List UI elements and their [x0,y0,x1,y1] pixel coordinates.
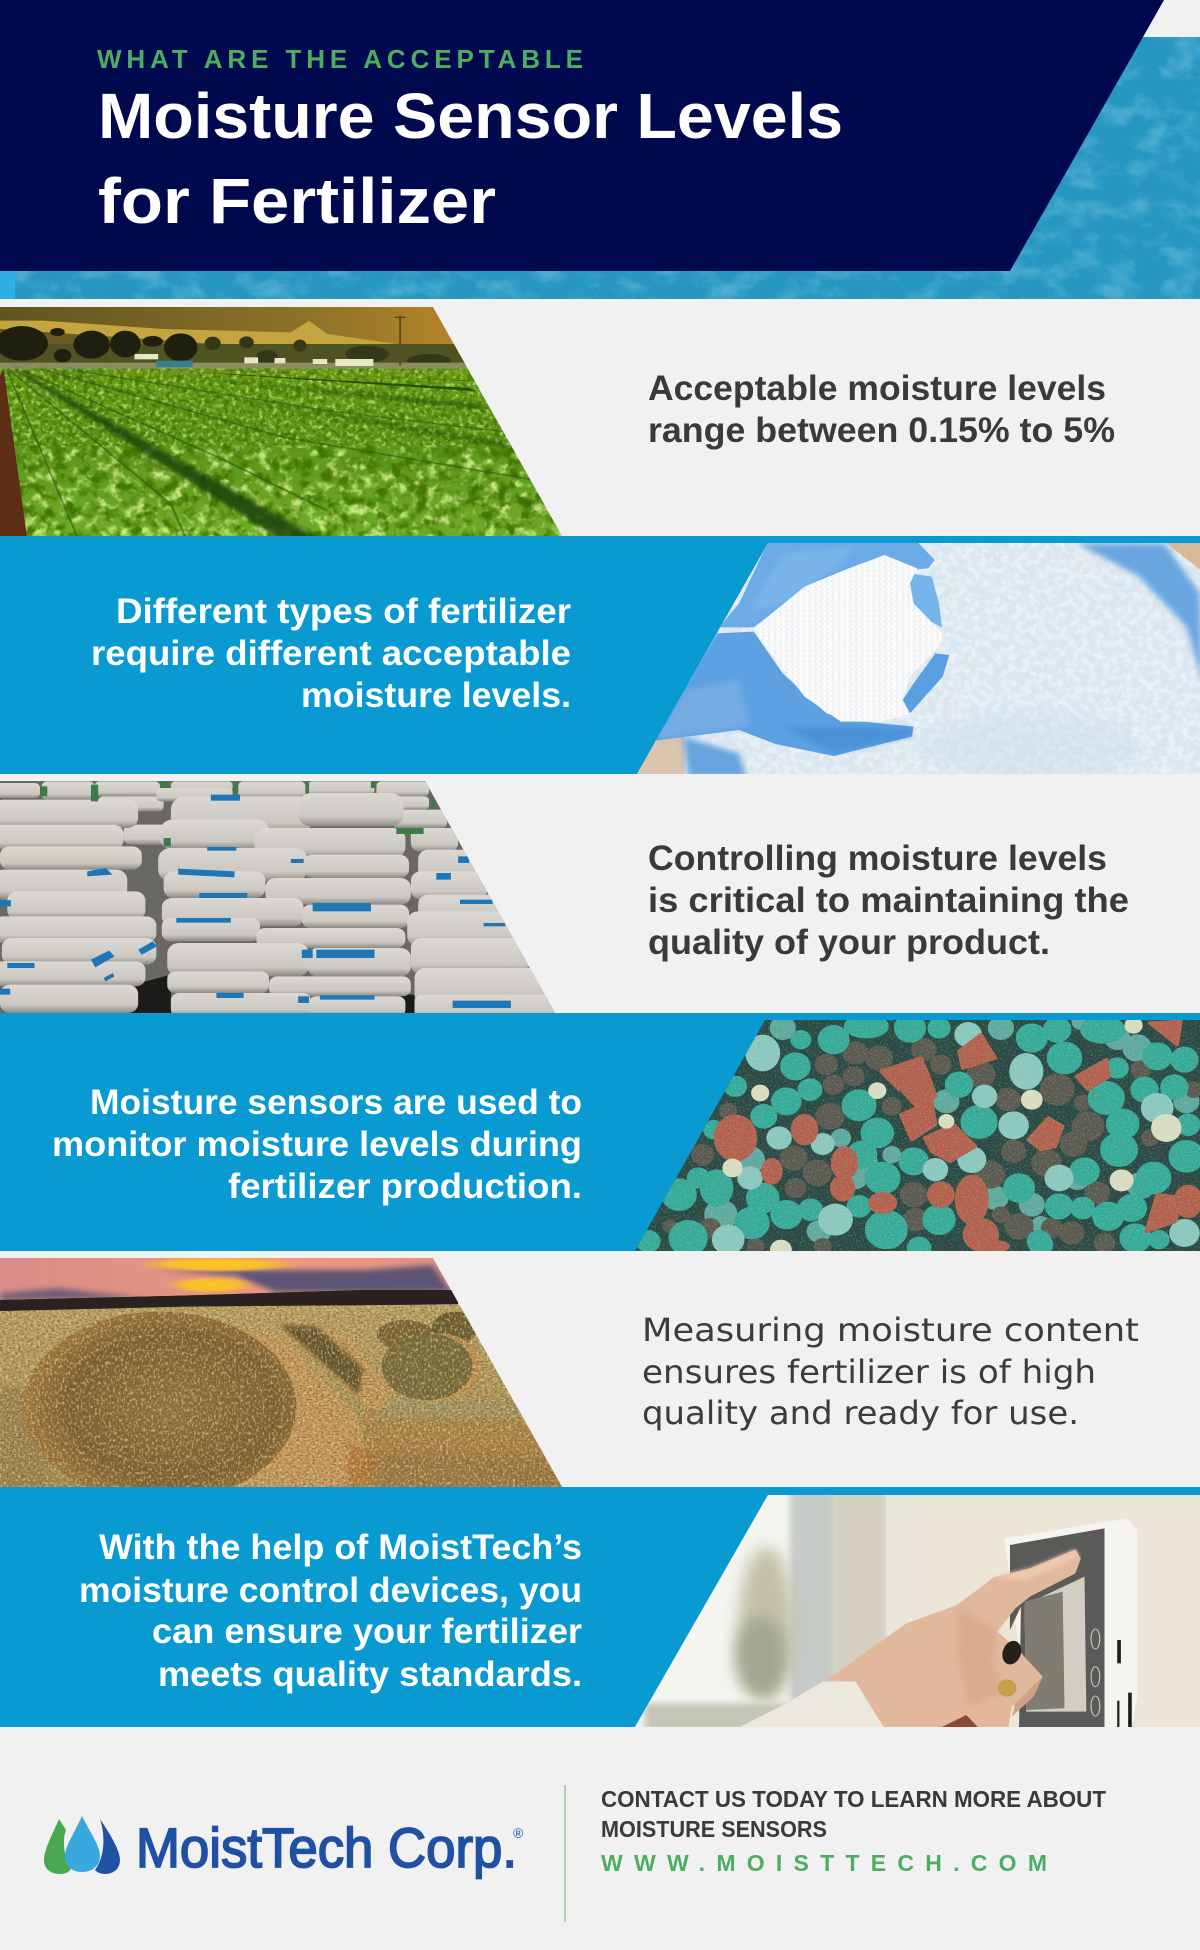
title: Moisture Sensor Levels [98,80,843,152]
row 2 text: require different acceptable [91,634,571,673]
footer contact text: MOISTURE SENSORS [601,1816,827,1842]
title: for Fertilizer [98,165,496,237]
row 2 text: moisture levels. [301,676,571,715]
row 3 text: quality of your product. [648,923,1050,962]
row 6 text: moisture control devices, you [79,1571,582,1610]
footer divider [564,1785,566,1922]
logo [44,1816,524,1879]
row 4 text [52,1083,582,1206]
row 1 text: range between 0.15% to 5% [648,411,1115,450]
row 5 text: Measuring moisture content [642,1311,1139,1349]
row 4 text: Moisture sensors are used to [90,1083,582,1122]
teal pellets [637,1015,1200,1258]
photo: lettuce field [0,304,582,539]
header panel [0,0,1200,299]
dark pellets [663,1038,1200,1255]
bag rim [1077,543,1200,683]
photo: gloved hand holding white granules [630,540,1200,780]
row 5 text [642,1311,1139,1432]
photo: finger pressing a wall control panel [630,1490,1200,1730]
row 6 text: meets quality standards. [158,1655,582,1694]
granule pile [754,555,943,722]
bare soil [0,369,27,539]
panel: blue band 6 [0,1487,1200,1727]
title [98,80,843,237]
hand [826,1549,1081,1728]
glove [719,542,935,627]
row 5 text: ensures fertilizer is of high [642,1353,1096,1391]
panel: blue band 2 [0,536,1200,774]
row 1 text [648,369,1115,450]
far bales [432,1312,476,1342]
row 3 text: is critical to maintaining the [648,881,1129,920]
control panel [1005,1518,1137,1728]
row 2 text [91,592,571,715]
website: WWW.MOISTTECH.COM [601,1850,1047,1876]
row 3 text [648,839,1129,962]
row 6 text [79,1528,582,1694]
rings [1002,1640,1022,1664]
cream pellets [722,1017,1182,1260]
row 5 text: quality and ready for use. [642,1394,1079,1432]
pale teal under-layer [688,1015,1197,1241]
row 3 text: Controlling moisture levels [648,839,1107,878]
sleeve [737,1682,885,1728]
photo: teal and red fertilizer pellets [630,1015,1200,1260]
second bale [280,1323,391,1412]
row 4 text: fertilizer production. [228,1167,582,1206]
row 1 text: Acceptable moisture levels [648,369,1106,408]
pale pellets [712,1022,1200,1255]
row 6 text: can ensure your fertilizer [152,1612,582,1651]
near leaf texture [0,446,582,539]
row 4 text: monitor moisture levels during [52,1125,582,1164]
eyebrow heading: WHAT ARE THE ACCEPTABLE [97,44,583,74]
footer contact text [601,1786,1106,1876]
photo: stacked fertilizer bags [0,778,582,1018]
icon: water drops [44,1816,120,1874]
photo: hay bales at sunset [0,1258,562,1487]
big bale [232,1326,374,1487]
wordmark: MoistTech Corp. [136,1816,517,1879]
row 2 text: Different types of fertilizer [116,592,571,631]
red pellets [715,1021,1200,1251]
crop furrows [13,369,571,539]
registered mark: ® [513,1825,524,1841]
panel: blue band 4 [0,1013,1200,1251]
row 6 text: With the help of MoistTech’s [99,1528,582,1567]
footer contact text: CONTACT US TODAY TO LEARN MORE ABOUT [601,1786,1106,1812]
far leaf texture [0,368,510,446]
